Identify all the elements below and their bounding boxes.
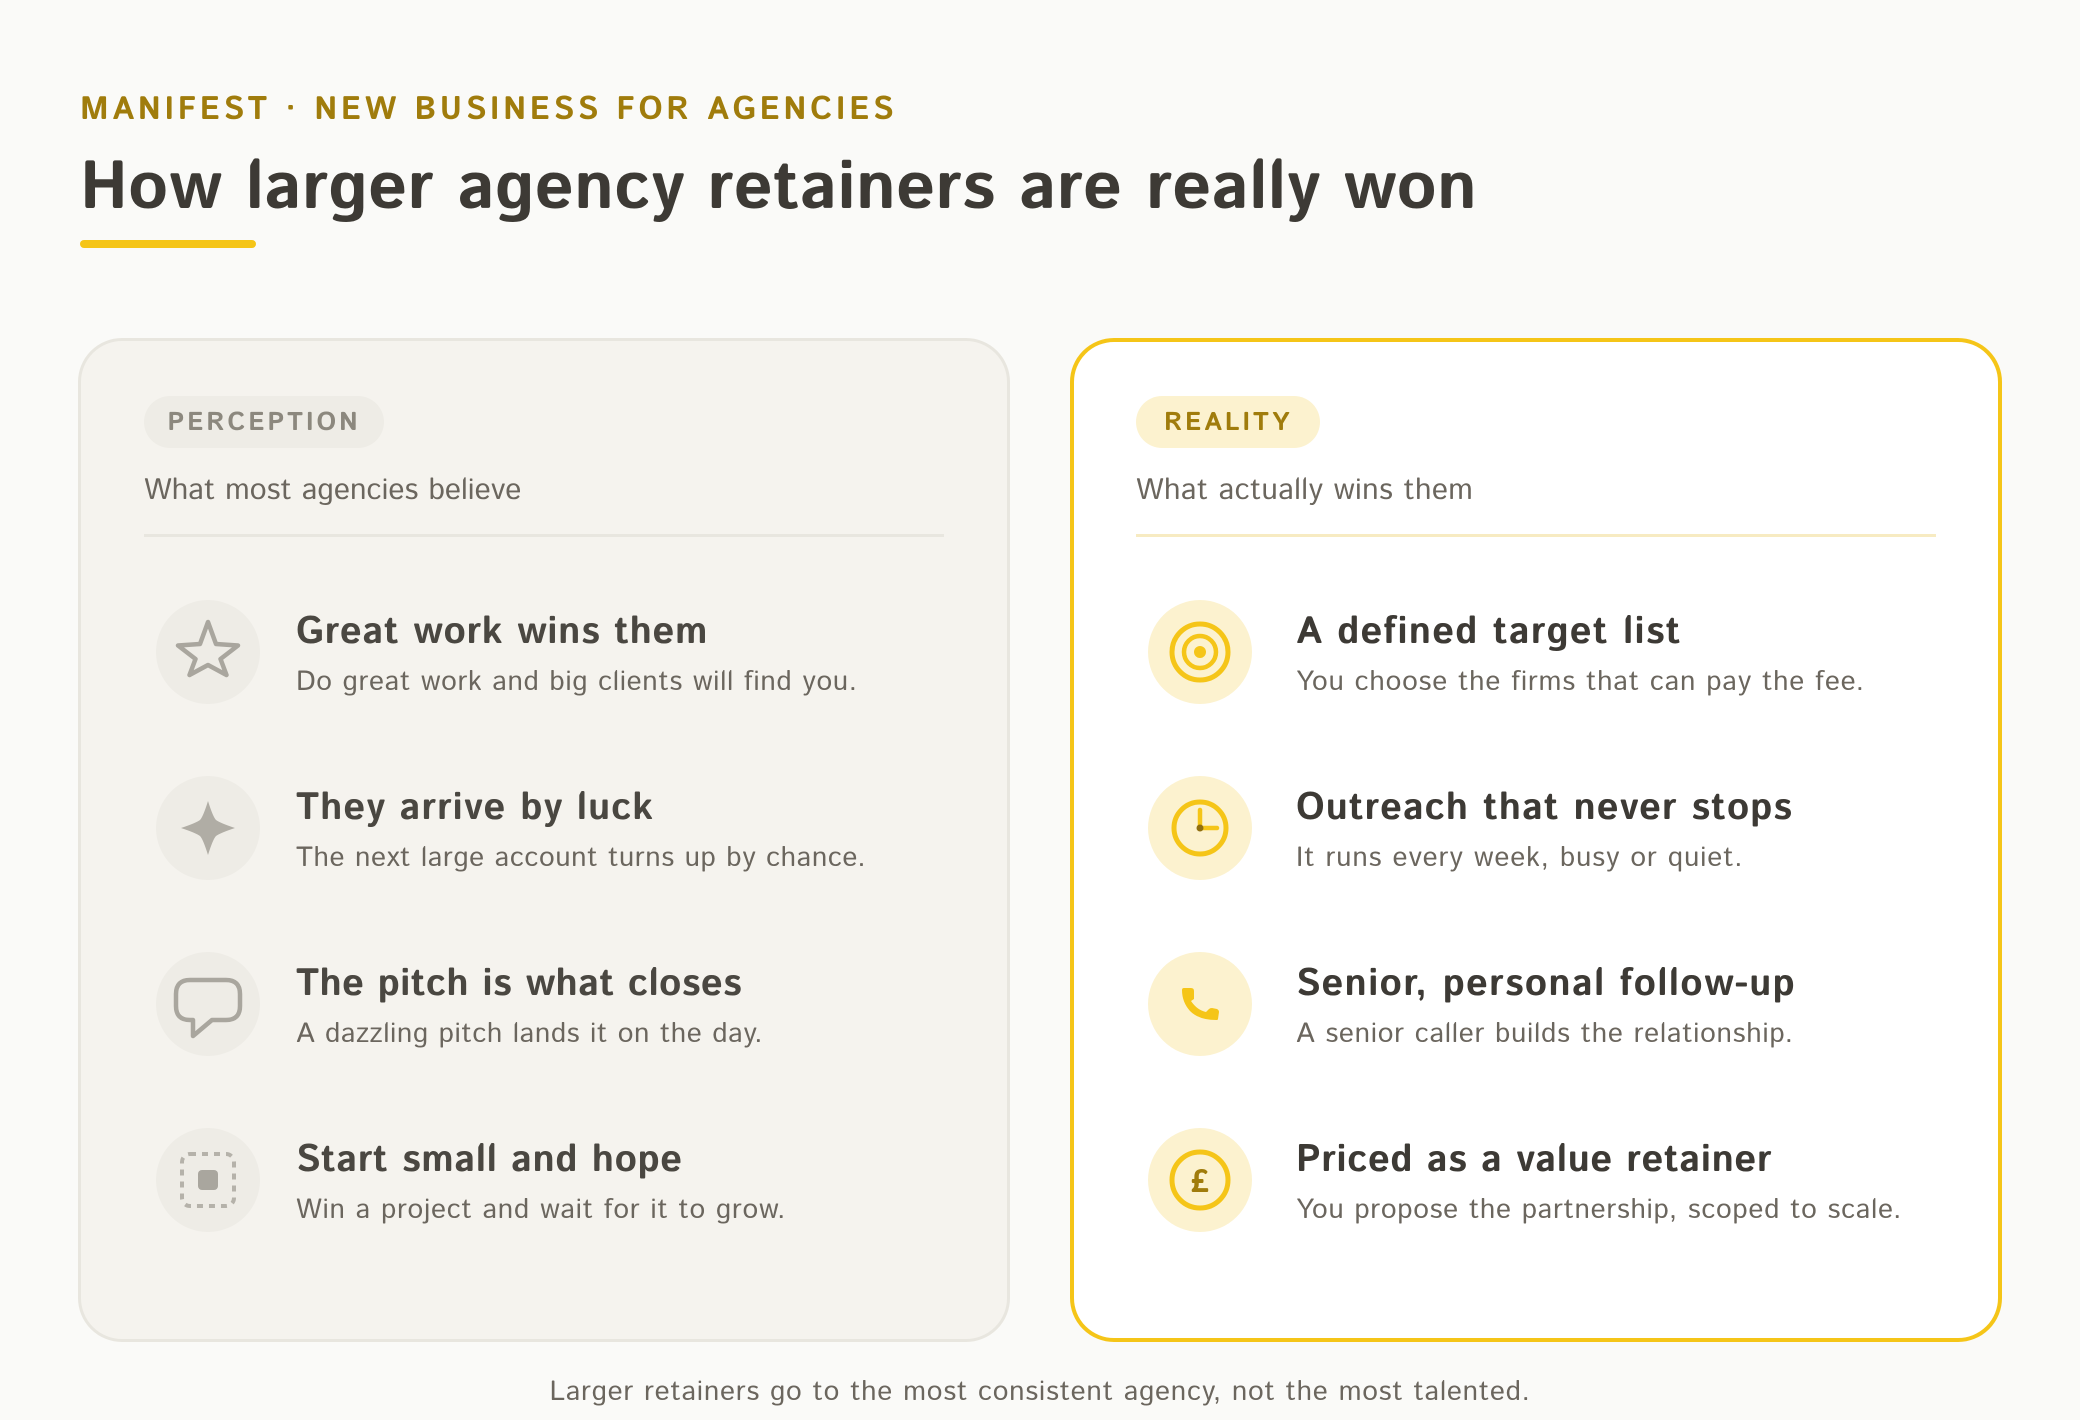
reality badge	[1136, 396, 1320, 448]
item title: target list: A defined target list	[1296, 606, 1682, 660]
icon: clock	[1174, 802, 1226, 854]
icon: phone	[1182, 988, 1219, 1020]
perception badge: PERCEPTION	[167, 405, 361, 442]
item text: outreach: It runs every week, busy or quiet.	[1296, 839, 1743, 879]
item text: follow-up: A senior caller builds the relationship.	[1296, 1015, 1794, 1055]
item title: start small: Start small and hope	[296, 1134, 683, 1188]
item text: start small: Win a project and wait for it to grow.	[296, 1191, 786, 1231]
item title: pitch: The pitch is what closes	[296, 958, 742, 1012]
icon circle: sparkle	[156, 776, 260, 880]
icon: sparkle	[181, 801, 235, 855]
icon: dashed square	[182, 1154, 234, 1206]
icon: target	[1172, 624, 1228, 680]
item title: follow-up: Senior, personal follow-up	[1296, 958, 1796, 1012]
icon circle: star	[156, 600, 260, 704]
item text: luck: The next large account turns up by chance.	[296, 839, 866, 879]
title: How larger agency retainers are really won	[80, 141, 1477, 238]
icon: pound coin: £	[1191, 1160, 1209, 1206]
icon circle: target	[1148, 600, 1252, 704]
icon circle: clock	[1148, 776, 1252, 880]
reality subtitle: What actually wins them	[1136, 469, 1473, 512]
icon circle: dashed square	[156, 1128, 260, 1232]
panel: reality	[1070, 338, 2002, 1342]
icon circle: speech bubble	[156, 952, 260, 1056]
item text: pitch: A dazzling pitch lands it on the day.	[296, 1015, 763, 1055]
icon: speech bubble	[176, 980, 240, 1036]
item title: luck: They arrive by luck	[296, 782, 654, 836]
title underline	[80, 240, 256, 248]
perception badge	[144, 396, 384, 448]
panel: perception	[78, 338, 1010, 1342]
item text: value retainer: You propose the partnership, scoped to scale.	[1296, 1191, 1902, 1231]
item title: great work: Great work wins them	[296, 606, 708, 660]
icon circle: phone	[1148, 952, 1252, 1056]
item title: outreach: Outreach that never stops	[1296, 782, 1793, 836]
perception subtitle: What most agencies believe	[144, 469, 521, 512]
icon: star	[178, 622, 238, 675]
eyebrow: MANIFEST · NEW BUSINESS FOR AGENCIES	[80, 87, 897, 133]
icon circle: pound	[1148, 1128, 1252, 1232]
reality badge: REALITY	[1164, 405, 1292, 442]
footer note: Larger retainers go to the most consistent agency, not the most talented.	[549, 1373, 1531, 1413]
icon: pound coin	[1172, 1152, 1228, 1208]
item title: value retainer: Priced as a value retainer	[1296, 1134, 1772, 1188]
item text: great work: Do great work and big clients will find you.	[296, 663, 858, 703]
item text: target list: You choose the firms that can pay the fee.	[1296, 663, 1865, 703]
